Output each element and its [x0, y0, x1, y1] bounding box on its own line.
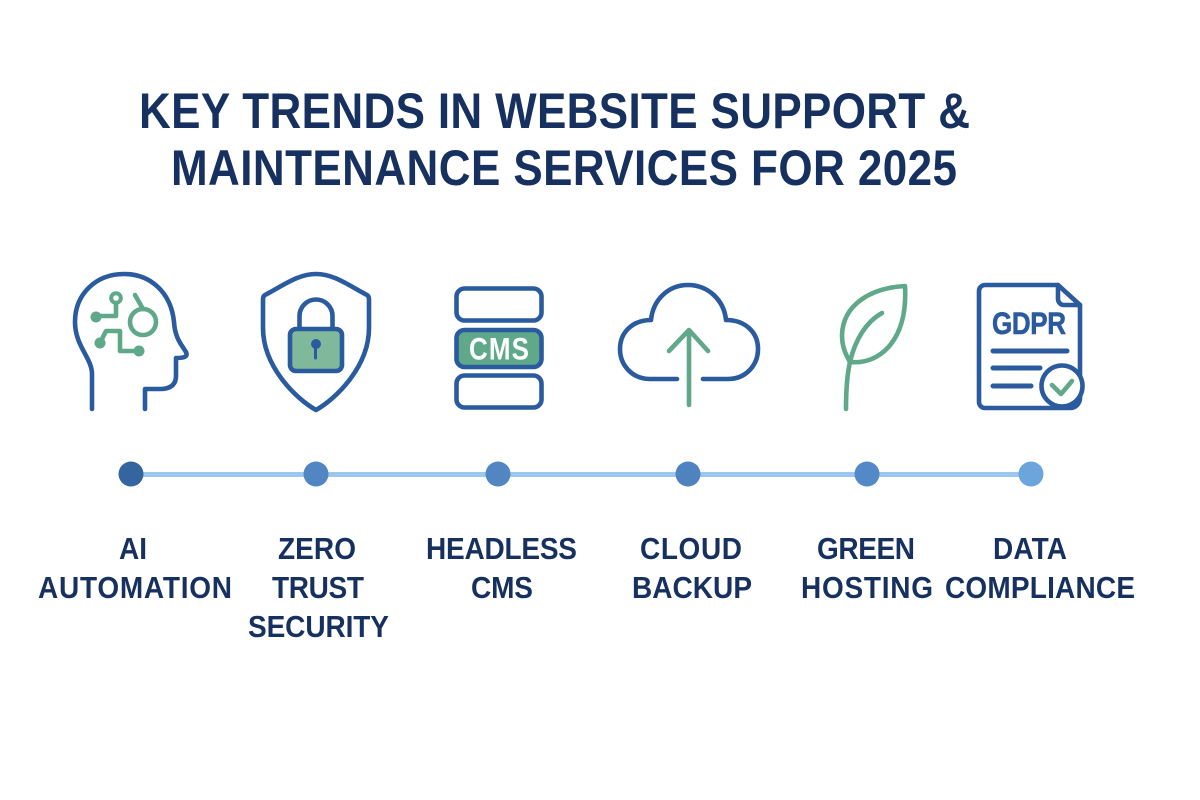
label: Headless CMS: CMS — [471, 572, 533, 605]
label: Zero Trust Security: ZERO — [278, 533, 356, 566]
icon: cloud upload — [620, 285, 758, 405]
icon: headless CMS stack: CMS — [469, 332, 529, 367]
label: Zero Trust Security — [248, 533, 389, 644]
title: KEY TRENDS IN WEBSITE SUPPORT & — [139, 82, 970, 139]
label: Headless CMS: HEADLESS — [426, 533, 577, 566]
label: Data Compliance: COMPLIANCE — [945, 572, 1135, 605]
label: Data Compliance: DATA — [993, 533, 1067, 566]
icon: AI head with circuits — [75, 274, 187, 409]
icon: GDPR document — [979, 285, 1082, 408]
label: Headless CMS — [426, 533, 577, 605]
label: Data Compliance — [945, 533, 1135, 605]
label: AI Automation: AUTOMATION — [38, 572, 232, 605]
label: Cloud Backup: CLOUD — [640, 533, 742, 566]
icon: shield with padlock — [263, 274, 369, 410]
icon: green leaf — [842, 286, 905, 409]
label: Zero Trust Security: SECURITY — [248, 611, 389, 644]
icon: headless CMS stack — [456, 288, 542, 408]
title — [139, 82, 970, 196]
label: Green Hosting: GREEN — [817, 533, 915, 566]
label: Zero Trust Security: TRUST — [272, 572, 364, 605]
label: Green Hosting: HOSTING — [801, 572, 933, 605]
label: AI Automation — [38, 533, 232, 605]
label: AI Automation: AI — [119, 533, 147, 566]
label: Green Hosting — [801, 533, 933, 605]
icon: GDPR document: GDPR — [992, 307, 1066, 342]
label: Cloud Backup — [632, 533, 752, 605]
timeline — [118, 462, 1044, 486]
title: MAINTENANCE SERVICES FOR 2025 — [171, 139, 957, 196]
label: Cloud Backup: BACKUP — [632, 572, 752, 605]
